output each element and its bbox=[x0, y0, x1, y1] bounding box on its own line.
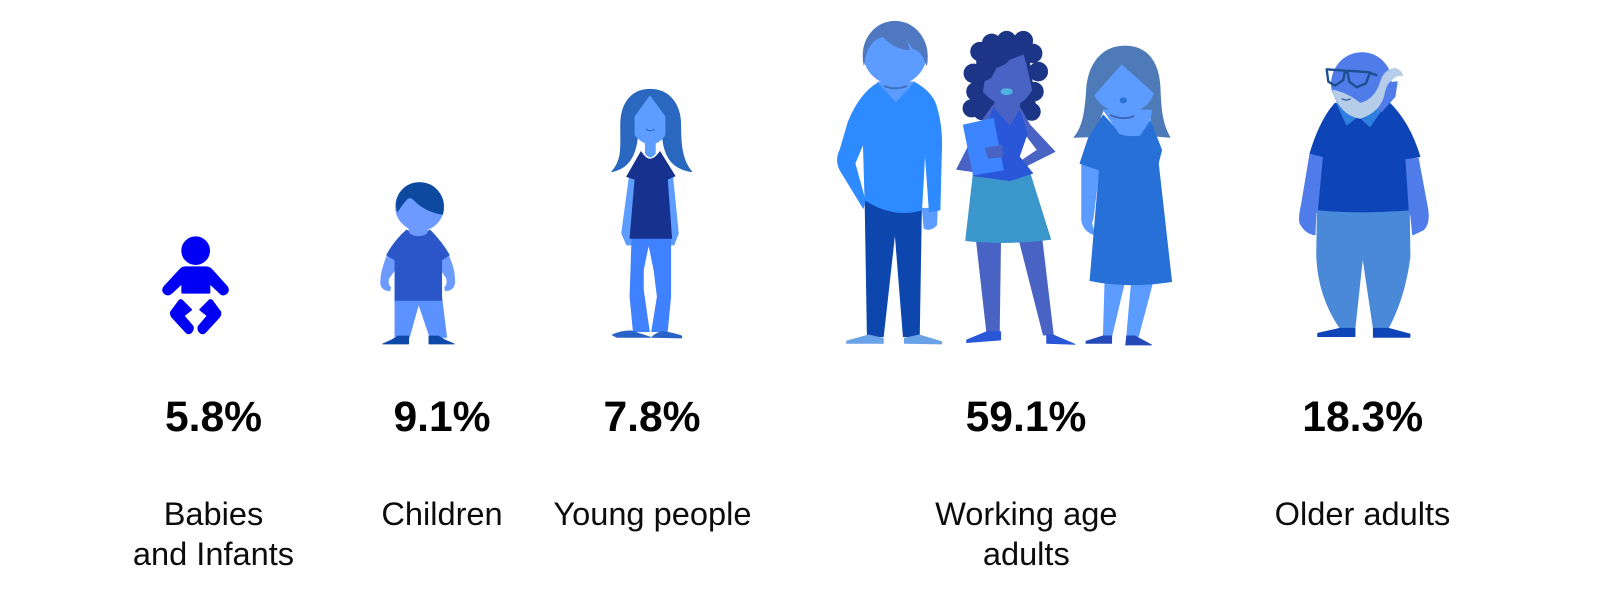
stat: babies and infants bbox=[133, 393, 294, 572]
stat: young people: Young people bbox=[553, 495, 751, 532]
stat: working age adults: adults bbox=[983, 535, 1070, 572]
icon: woman in dress bbox=[1074, 46, 1172, 345]
icon: baby figure bbox=[163, 237, 228, 333]
stat: older adults: 18.3% bbox=[1302, 393, 1423, 441]
stat: young people: 7.8% bbox=[603, 393, 701, 441]
icon: woman with folder bbox=[957, 31, 1075, 344]
stat: older adults: Older adults bbox=[1275, 495, 1450, 532]
stat: working age adults: Working age bbox=[935, 495, 1117, 532]
icon: older adult figure bbox=[1299, 103, 1428, 337]
icon: young person figure bbox=[612, 89, 692, 338]
icon: working age adults group bbox=[837, 21, 1075, 344]
stat: children: Children bbox=[381, 495, 503, 532]
stat: babies and infants: 5.8% bbox=[165, 393, 262, 441]
stat: babies and infants: and Infants bbox=[133, 535, 294, 572]
stat: children bbox=[381, 393, 503, 532]
stat: young people bbox=[553, 393, 751, 532]
stat: babies and infants: Babies bbox=[164, 495, 263, 532]
stat: working age adults: 59.1% bbox=[966, 393, 1086, 441]
icon: older adult head bbox=[1327, 53, 1403, 127]
stat: children: 9.1% bbox=[393, 393, 491, 441]
icon: child figure bbox=[381, 183, 455, 344]
stat: working age adults bbox=[935, 393, 1117, 572]
icon: man bbox=[837, 21, 942, 344]
stat: older adults bbox=[1275, 393, 1450, 532]
